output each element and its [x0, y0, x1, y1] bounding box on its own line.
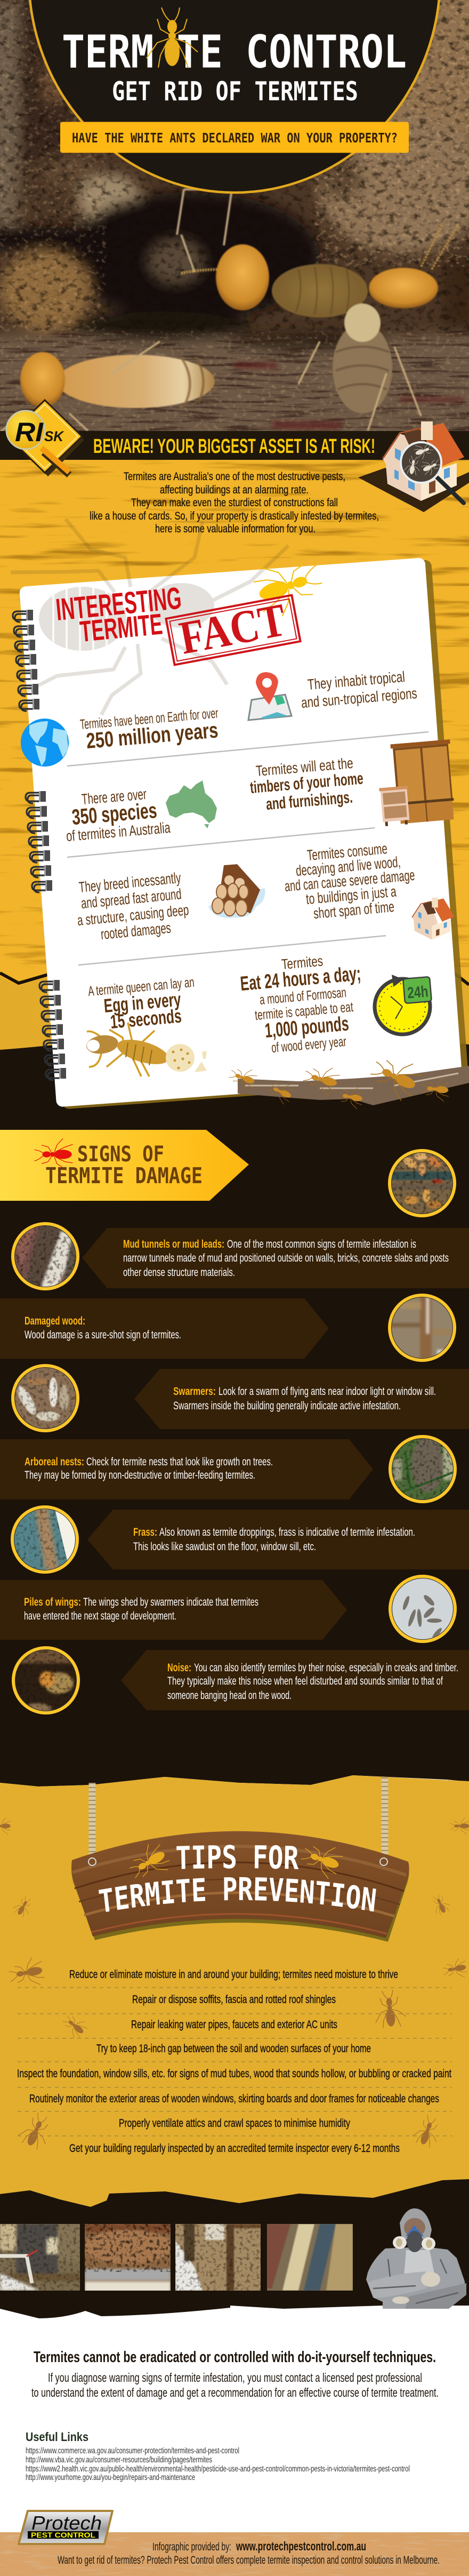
icon: wardrobe and side table: [375, 739, 457, 826]
text: piles of wings: The wings shed by swarmers indicate that termites: [83, 1596, 258, 1608]
fact: 250 million years: Termites have been on Earth for over: [79, 705, 219, 732]
fact: tropical regions: [301, 668, 418, 711]
fact: queen egg: A termite queen can lay an: [87, 974, 195, 999]
tips list: Try to keep 18-inch gap between the soil and wooden surfaces of your home: [96, 2043, 371, 2055]
pest controller in protective suit: [366, 2208, 466, 2309]
intro paragraph: like a house of cards. So, if your property is drastically infested by termites,: [90, 510, 379, 522]
fact: 250 million years: [79, 705, 219, 753]
subtitle: GET RID OF TERMITES: [112, 76, 358, 107]
dark section: signs of termite damage background: [0, 1040, 469, 1787]
banner: signs of termite damage: [0, 1130, 249, 1201]
dark band with damage photos: [0, 2179, 469, 2318]
tips list: Repair leaking water pipes, faucets and exterior AC units: [131, 2019, 337, 2031]
logo: protech pest control: PEST CONTROL: [31, 2531, 95, 2539]
footer wood: [0, 2532, 469, 2576]
fact: timbers: and furnishings.: [265, 787, 353, 814]
useful links list: http://www.yourhome.gov.au/you-begin/repairs-and-maintenance: [26, 2473, 195, 2482]
intro paragraph: Termites are Australia's one of the most destructive pests,: [124, 470, 345, 483]
fact: 350 species: of termites in Australia: [66, 819, 171, 844]
fact: timbers: Termites will eat the: [255, 755, 354, 779]
fact: queen egg: 15 seconds: [109, 1004, 182, 1033]
icon: wood logs: [208, 864, 265, 918]
photo: bricks and rotted wood: [267, 2224, 353, 2291]
icon: red termite: [35, 1138, 73, 1170]
fact: eat 24 hours: 1,000 pounds: [264, 1012, 350, 1042]
logo: protech pest control: Protech: [31, 2512, 102, 2534]
text: frass: Frass:: [133, 1526, 157, 1538]
icon: termite queen with eggs: [85, 1023, 207, 1076]
panel: piles of wings: [0, 1580, 347, 1640]
tips list: Properly ventilate attics and crawl spaces to minimise humidity: [119, 2117, 350, 2130]
circle photo: arboreal nest: [389, 1435, 457, 1502]
text: frass: This looks like sawdust on the floor, window sill, etc.: [133, 1541, 316, 1553]
fact: breeding: [77, 870, 190, 943]
branch with termites: [227, 1049, 469, 1110]
wooden sign: tips for termite prevention: [71, 1831, 409, 1942]
fact: queen egg: [87, 974, 195, 1033]
text: arboreal nests: Arboreal nests:: [25, 1456, 84, 1468]
yellow wood background: [0, 459, 469, 1056]
useful links list: [26, 2446, 410, 2482]
stamp: fact: FACT: [176, 594, 290, 665]
icon: yellow termite above stamp: [249, 550, 328, 621]
icon: Australia map: [166, 780, 217, 828]
circle photo: noise: [13, 1648, 80, 1716]
text: noise: someone banging head on the wood.: [167, 1689, 292, 1702]
tips list: Repair or dispose soffits, fascia and rotted roof shingles: [132, 1993, 336, 2006]
text: swarmers: Swarmers:: [173, 1385, 216, 1398]
text: swarmers: [173, 1385, 436, 1412]
circle photo: piles of wings: [389, 1575, 456, 1641]
question banner: [60, 122, 409, 153]
fact: breeding: They breed incessantly: [78, 870, 182, 896]
hero photo: termites in soil: [0, 0, 469, 442]
icon: 24h clock: [375, 975, 432, 1034]
tips list: [17, 1968, 451, 2155]
fact: breeding: a structure, causing deep: [77, 902, 190, 929]
footer text: www.protechpestcontrol.com.au: [236, 2539, 366, 2553]
panel: swarmers: [134, 1369, 469, 1429]
text: noise: Noise:: [167, 1662, 191, 1674]
panel: arboreal nests: [0, 1439, 373, 1500]
fact: timbers: timbers of your home: [249, 769, 364, 797]
fact: tropical regions: They inhabit tropical: [307, 668, 406, 693]
text: arboreal nests: They may be formed by non-destructive or timber-feeding termites.: [25, 1469, 255, 1481]
icon: house under magnifier: [358, 421, 469, 512]
icon: risk sign with magnifier: RI: [15, 417, 44, 447]
text: piles of wings: have entered the next stage of development.: [24, 1610, 176, 1622]
fact: severe damage: [284, 840, 416, 922]
useful links list: https://www.commerce.wa.gov.au/consumer-protection/termites-and-pest-control: [26, 2446, 239, 2455]
icon: small house: [412, 898, 455, 940]
fact: tropical regions: and sun-tropical regions: [301, 685, 418, 711]
dark band: [0, 431, 469, 460]
text: noise: [167, 1662, 458, 1702]
fact: breeding: and spread fast around: [80, 886, 182, 912]
heading: termite prevention: TERMITE PREVENTION: [99, 1877, 376, 1912]
text: frass: [133, 1526, 415, 1553]
panel: damaged wood: [0, 1298, 329, 1359]
photo: eaten timber: [83, 2224, 173, 2292]
icons: sign termites: [124, 1838, 345, 1886]
text: piles of wings: Piles of wings:: [24, 1596, 81, 1608]
fact: severe damage: decaying and live wood,: [295, 854, 401, 879]
fact: 350 species: 350 species: [71, 798, 158, 830]
text: mud tunnels: [123, 1238, 449, 1279]
banner: signs of termite damage: TERMITE DAMAGE: [45, 1163, 203, 1189]
fact: severe damage: Termites consume: [306, 840, 388, 864]
text: arboreal nests: Check for termite nests that look like growth on trees.: [86, 1456, 273, 1468]
circle photo: frass: [11, 1507, 80, 1574]
fact: queen egg: Egg in every: [103, 988, 182, 1017]
logo: protech pest control: [19, 2511, 112, 2544]
text: piles of wings: [24, 1596, 258, 1622]
fact: eat 24 hours: Eat 24 hours a day;: [239, 962, 362, 995]
fact: eat 24 hours: Termites: [281, 953, 324, 972]
fact: eat 24 hours: a mound of Formosan: [259, 984, 347, 1008]
text: mud tunnels: Mud tunnels or mud leads:: [123, 1238, 224, 1250]
text: mud tunnels: other dense structure materials.: [123, 1266, 235, 1279]
intro paragraph: affecting buildings at an alarming rate.: [160, 484, 309, 496]
circle photo: mud tunnels: [13, 1222, 80, 1291]
icon: risk sign with magnifier: [6, 400, 84, 476]
heading: interesting termite: [54, 581, 183, 648]
main title: TERMITE CONTROL: [62, 26, 407, 79]
spiral rings: [13, 610, 66, 1080]
photo: damaged wall with wires: [0, 2224, 80, 2291]
notebook panel: interesting termite facts: [11, 519, 469, 1110]
icon: risk sign with magnifier: SK: [44, 428, 64, 444]
icon: globe: [21, 719, 69, 767]
yellow section: tips for termite prevention background: [0, 1775, 469, 2207]
text: damaged wood: [25, 1315, 181, 1341]
decorative termites on yellow: [0, 1818, 469, 2152]
fact: breeding: rooted damages: [100, 919, 172, 943]
termite watermark: [11, 519, 288, 715]
fact: severe damage: short span of time: [313, 898, 395, 922]
photo: wall damage: [175, 2224, 261, 2291]
icon: map pin: [248, 672, 292, 720]
fact: 350 species: [66, 786, 171, 844]
useful links heading: Useful Links: [26, 2430, 88, 2444]
panel: mud tunnels: [82, 1228, 469, 1288]
footer text: [58, 2539, 440, 2566]
intro paragraph: here is some valuable information for you.: [155, 523, 316, 535]
fact: timbers: [249, 755, 364, 814]
circle photo: swarmers: [13, 1366, 80, 1432]
useful links list: http://www.vba.vic.gov.au/consumer-resources/building/pages/termites: [26, 2455, 212, 2465]
text: arboreal nests: [25, 1456, 273, 1481]
panel: frass: [87, 1510, 469, 1569]
fact: 250 million years: 250 million years: [85, 717, 219, 753]
fact: eat 24 hours: of wood every year: [271, 1033, 347, 1056]
panel: noise: [121, 1650, 469, 1710]
closing statement: [31, 2349, 439, 2399]
fact: 350 species: There are over: [81, 786, 147, 808]
heading: interesting termite: INTERESTING: [54, 581, 183, 627]
fact: severe damage: to buildings in just a: [305, 883, 397, 907]
circle photo: damaged wood: [389, 1294, 458, 1360]
question banner: HAVE THE WHITE ANTS DECLARED WAR ON YOUR PROPERTY?: [72, 130, 398, 146]
footer text: Infographic provided by:: [152, 2541, 231, 2553]
icon: 24h clock: 24h: [407, 983, 429, 1002]
heading: interesting termite: TERMITE: [78, 607, 164, 648]
fact: eat 24 hours: [239, 953, 362, 1056]
ropes: [92, 1777, 385, 1864]
intro paragraph: They can make even the sturdiest of constructions fall: [131, 497, 338, 509]
banner: signs of termite damage: SIGNS OF: [77, 1142, 164, 1167]
intro paragraph: [90, 470, 379, 535]
text: damaged wood: Damaged wood:: [25, 1315, 85, 1327]
heading: tips for: TIPS FOR: [176, 1845, 298, 1869]
circle photo: termites: [389, 1150, 456, 1216]
title medallion: [29, 0, 440, 193]
text: damaged wood: Wood damage is a sure-shot sign of termites.: [25, 1329, 181, 1341]
icon: yellow termite in title: [147, 7, 198, 68]
fact: eat 24 hours: termite is capable to eat: [254, 999, 354, 1023]
